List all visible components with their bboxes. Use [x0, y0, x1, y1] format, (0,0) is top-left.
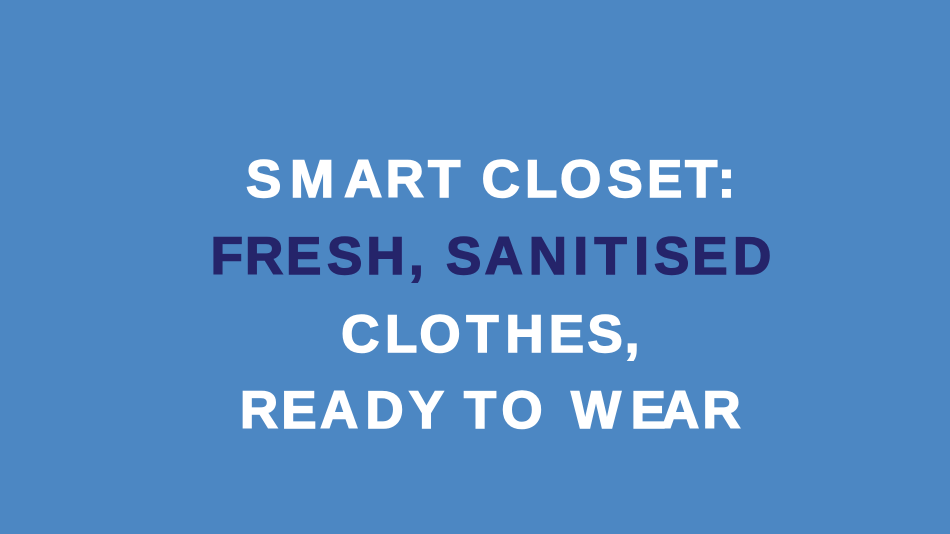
title line 4: READY TO WEAR	[240, 381, 741, 440]
title line 1: SMART CLOSET:	[246, 150, 735, 209]
title	[211, 150, 771, 440]
title line 2 highlighted: FRESH, SANITISED	[211, 227, 771, 286]
title line 3: CLOTHES,	[341, 305, 640, 364]
